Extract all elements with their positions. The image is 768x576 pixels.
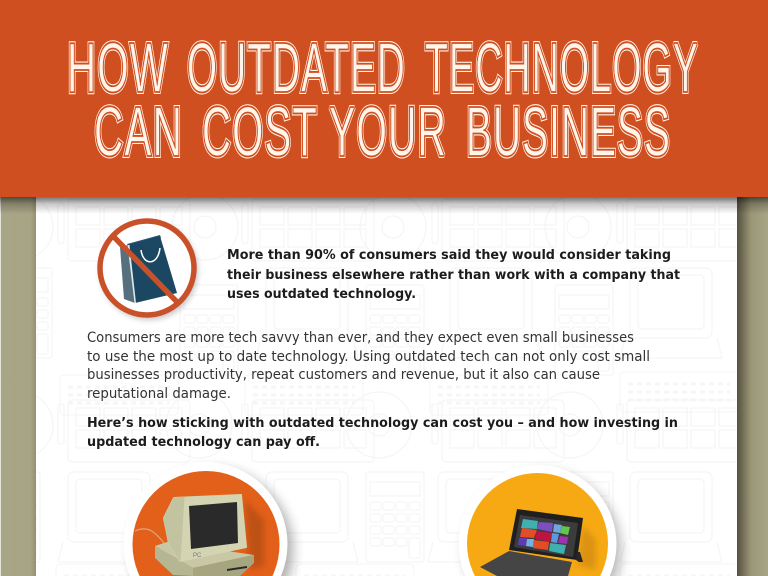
header band — [0, 0, 768, 197]
title: OUTDATED — [187, 28, 406, 106]
shadow below header — [0, 197, 768, 214]
icon: modern tablet on yellow circle — [458, 465, 621, 576]
callout: 90% statistic — [227, 247, 680, 302]
icon: old desktop computer on orange circle: PC — [193, 553, 202, 559]
title: COST — [202, 92, 318, 170]
title — [67, 28, 699, 170]
text block: intro paragraph: Consumers are more tech savvy than ever, and they expect even small businesses — [87, 330, 634, 346]
text block: intro paragraph: businesses productivity, repeat customers and revenue, but it also can cause — [87, 367, 600, 383]
text block: bold lead-in — [87, 415, 678, 450]
icon: old desktop computer on orange circle — [124, 462, 293, 576]
icon: crossed-out shopping bag — [100, 221, 198, 320]
white content panel — [36, 190, 737, 576]
title: HOW — [67, 28, 169, 106]
callout: 90% statistic: uses outdated technology. — [227, 286, 416, 302]
background pattern of faint tech icons — [0, 194, 749, 576]
text block: bold lead-in: updated technology can pay off. — [87, 434, 320, 450]
text block: intro paragraph: to use the most up to date technology. Using outdated tech can not only cost small — [87, 349, 650, 365]
side background: olive — [0, 190, 768, 576]
callout: 90% statistic: their business elsewhere rather than work with a company that — [227, 267, 680, 283]
text block: intro paragraph: reputational damage. — [87, 386, 231, 402]
callout: 90% statistic: More than 90% of consumers said they would consider taking — [227, 247, 671, 263]
text block: bold lead-in: Here’s how sticking with outdated technology can cost you – and how investing in — [87, 415, 678, 431]
title: YOUR — [329, 92, 447, 170]
title: CAN — [94, 92, 183, 170]
text block: intro paragraph — [87, 330, 650, 402]
